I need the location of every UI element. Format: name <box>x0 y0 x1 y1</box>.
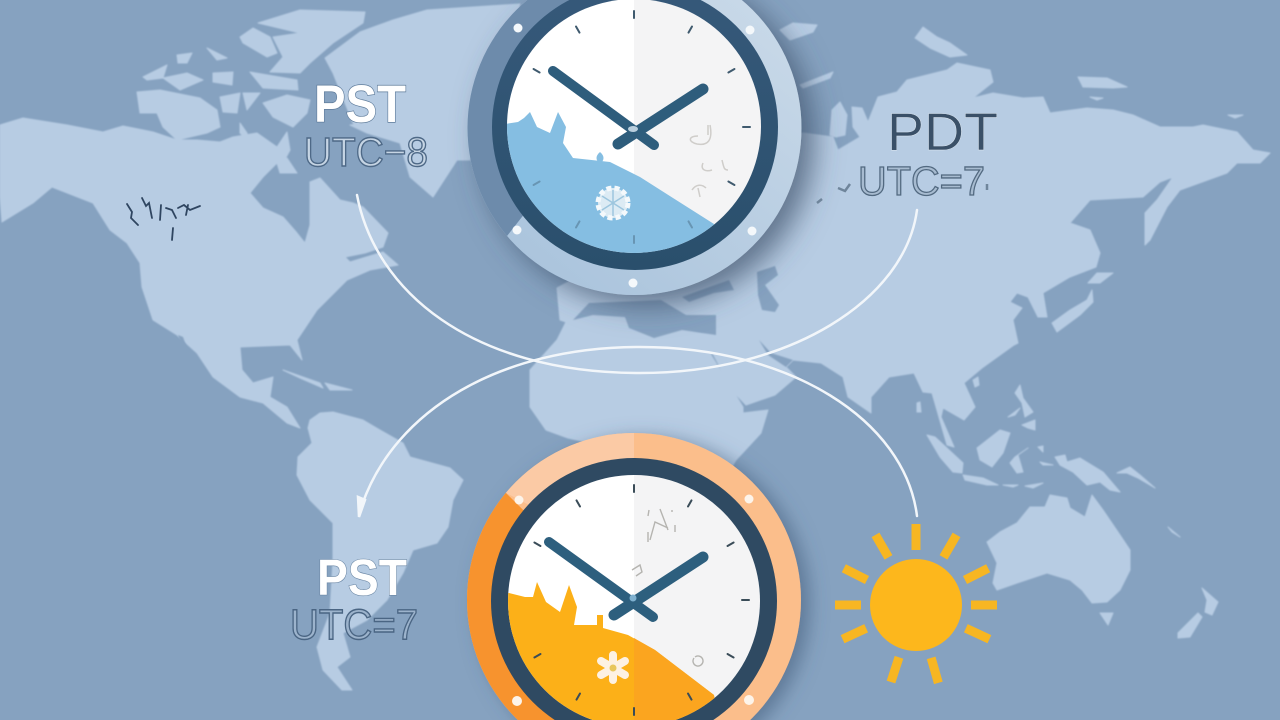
PDT heading: PDT <box>887 103 998 162</box>
label: PST UTC=7 <box>290 549 418 649</box>
sunny landscape <box>500 582 720 720</box>
UTC=7 offset: UTC=7 <box>858 158 985 204</box>
land: north america <box>0 118 398 428</box>
face scribbles <box>632 509 703 666</box>
sea: gulf of california <box>178 335 194 368</box>
clock: summer <box>440 420 801 720</box>
land: caribbean islands <box>283 370 352 390</box>
dark ring <box>491 458 777 720</box>
arc: PST to PDT <box>357 195 917 373</box>
land: africa <box>530 315 768 540</box>
rim top left segment <box>506 433 634 504</box>
label: PST UTC-8 <box>304 75 428 175</box>
clock hands <box>549 542 703 617</box>
clock face <box>500 470 768 720</box>
land: south america <box>297 412 463 690</box>
hour ticks <box>534 11 750 243</box>
UTC-8 offset: UTC−8 <box>304 129 428 175</box>
PST heading: PST <box>314 75 406 134</box>
small tree <box>596 152 604 162</box>
rim bolts <box>512 24 756 288</box>
label: PDT UTC=7 <box>817 103 998 204</box>
clock hands <box>553 71 703 145</box>
rim dark segment <box>467 492 554 720</box>
dark ring <box>492 0 778 270</box>
land: northern islands <box>780 23 1243 137</box>
scribble mark on map <box>127 198 200 240</box>
PST heading: PST <box>317 549 407 606</box>
land: arctic islands <box>137 10 365 173</box>
rim bolts <box>512 494 754 706</box>
land: australia <box>987 495 1130 625</box>
land: new zealand <box>1178 588 1218 638</box>
arrowhead <box>358 497 365 517</box>
sea: caspian <box>757 266 779 312</box>
land: japan <box>1052 273 1113 332</box>
stray marks <box>817 184 987 203</box>
hour ticks <box>534 485 749 715</box>
sea: mediterranean <box>573 300 716 338</box>
clock rim <box>468 0 802 295</box>
icon: snowflake <box>598 188 628 218</box>
land: greenland <box>325 4 520 197</box>
icon: sun <box>835 524 997 683</box>
face scribbles <box>690 125 728 197</box>
inland seas <box>178 266 793 368</box>
clock rim <box>467 433 801 720</box>
sea: black sea <box>682 280 734 302</box>
icon: flower snowflake <box>601 655 625 680</box>
land: eurasia <box>557 63 1270 447</box>
land: southeast asia islands <box>917 377 1180 537</box>
route arcs <box>357 195 917 517</box>
UTC=7 offset: UTC=7 <box>290 601 418 649</box>
clock: winter <box>440 0 802 295</box>
sea: persian gulf <box>759 340 793 367</box>
rim dark segment <box>468 0 569 236</box>
arc: PDT to PST summer <box>362 347 917 516</box>
snowy landscape <box>507 112 714 253</box>
clock face <box>507 0 761 253</box>
